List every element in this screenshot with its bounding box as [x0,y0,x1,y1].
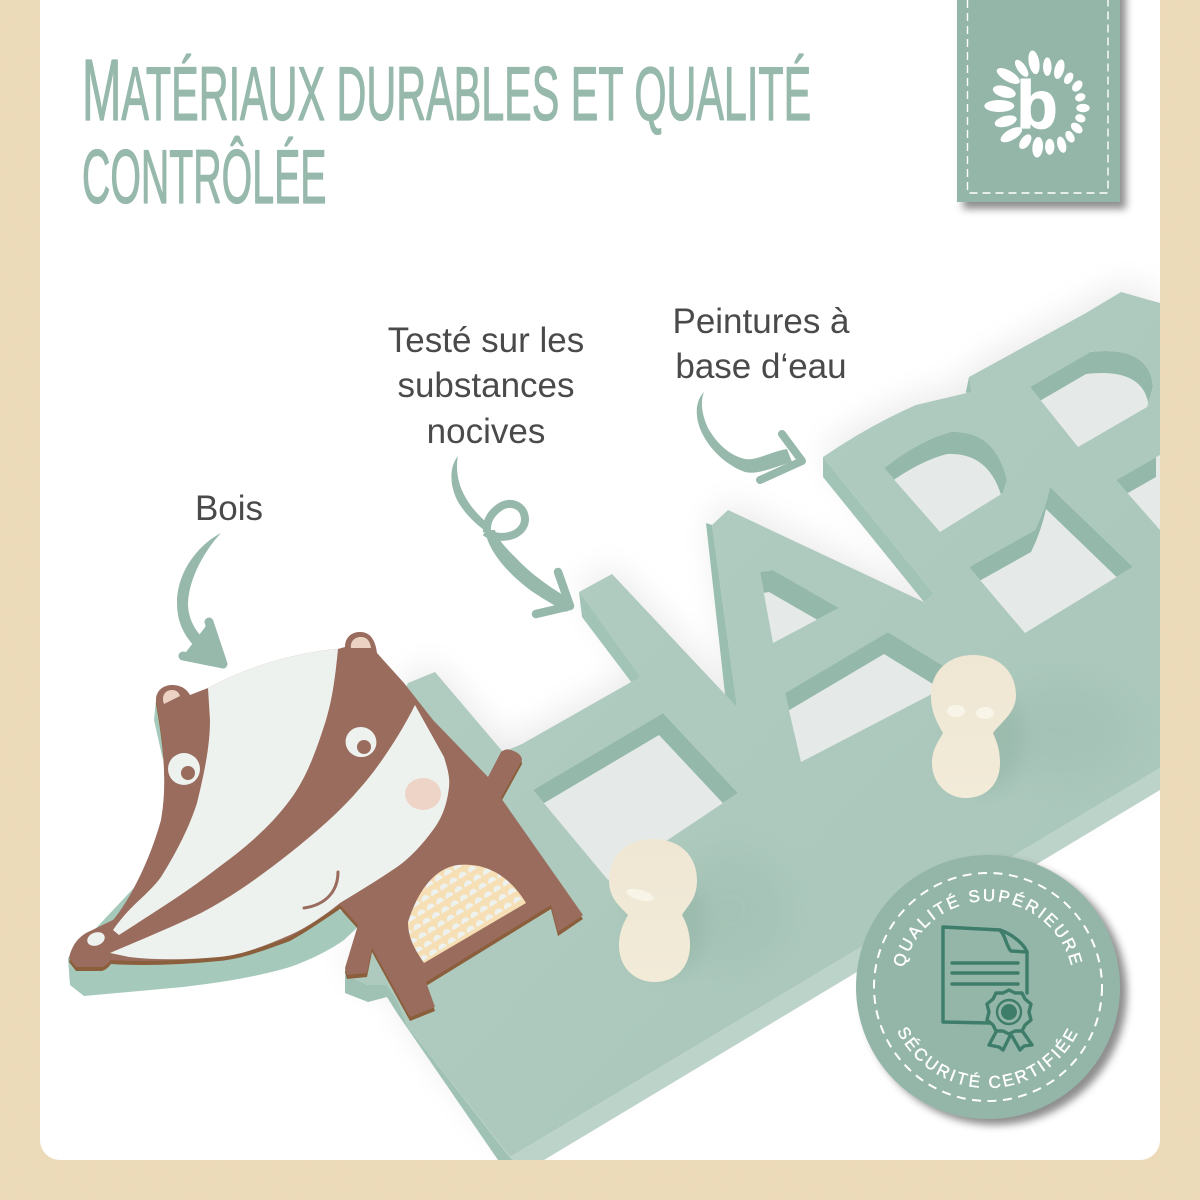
icon: rosette [987,990,1031,1034]
right eye [341,723,381,761]
cheek [405,778,441,810]
icon: certificate [943,927,1032,1050]
title line 1: MATÉRIAUX DURABLES ET QUALITÉ [82,42,811,139]
title line 2: CONTRÔLÉE [82,134,326,219]
nose highlight [85,930,107,948]
label: Bois: Bois [195,489,263,528]
arrow: Bois [177,533,223,664]
label: Testé sur les substances nocives: substances [397,366,575,405]
product: coat rack board [341,286,1160,1179]
seal top text: QUALITÉ SUPÉRIEURE [894,889,1082,966]
label: Testé sur les substances nocives: nocives [427,412,545,451]
badger figure [69,632,583,1021]
peg 2 [931,655,1023,798]
window interiors [533,351,1160,880]
label: Peintures à base d'eau: Peintures à [672,302,850,341]
label: Peintures à base d'eau: base d‘eau [675,347,847,386]
title [82,42,811,219]
smile [304,872,338,908]
window inner walls [533,351,1156,803]
brown body [69,632,583,1017]
seal shadow [863,861,1127,1125]
seal bottom text: SÉCURITÉ CERTIFIÉE [898,1027,1078,1088]
left eye [168,753,200,785]
wood edge [69,636,583,1021]
label: Testé sur les substances nocives: Testé sur les [388,321,584,360]
badger backing board [68,700,360,996]
belly pattern [408,865,526,963]
board side faces [345,377,1160,1160]
logo flower [984,50,1090,158]
peg 1 [609,839,706,982]
ears [163,690,180,704]
board top surface [345,292,1160,1157]
arrow: substances [451,456,572,614]
seal disc [856,855,1120,1119]
document tag with logo [957,0,1126,209]
lower white stripe [110,705,449,959]
logo letter: b [1016,67,1058,143]
upper white stripe [113,649,338,935]
soft shading on the board [670,680,1130,970]
arrow: peintures [697,392,802,480]
quality seal [856,855,1132,1130]
